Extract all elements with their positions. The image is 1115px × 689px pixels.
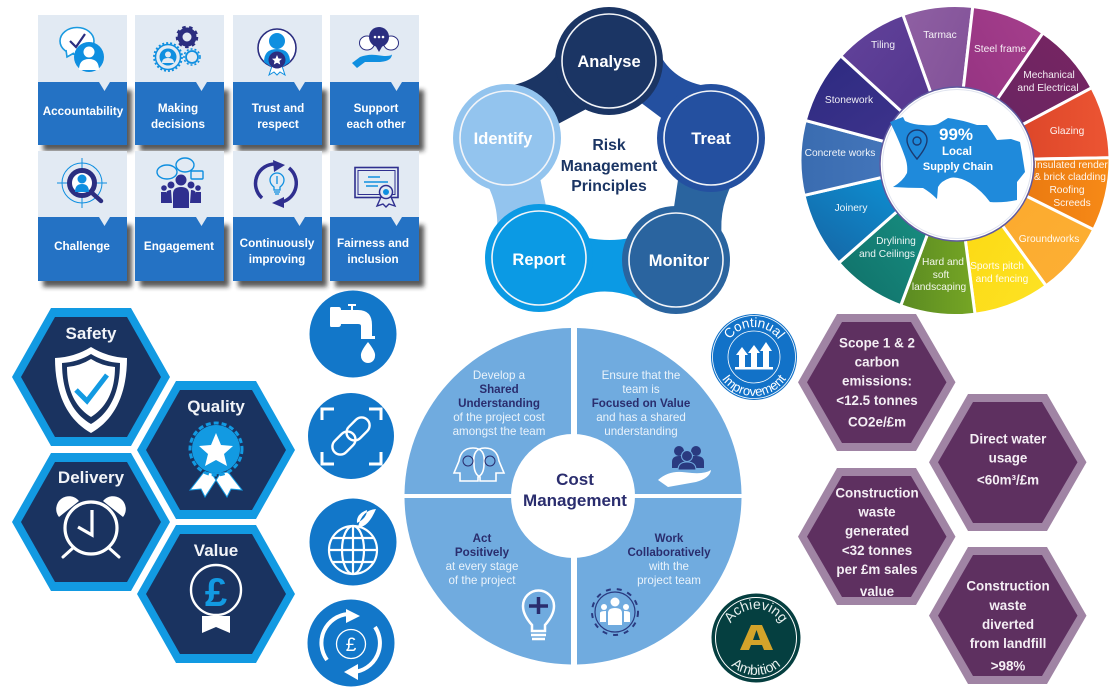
segment labels: [805, 30, 1108, 293]
card: Challenge: Challenge: [54, 240, 110, 253]
text: centre title: Principles: [571, 178, 647, 195]
text: shared understanding: Understanding: [458, 397, 540, 410]
panel: hexagon Quality: [137, 381, 295, 519]
segment labels: Tarmac: [923, 30, 957, 41]
icon: rosette: [190, 423, 242, 497]
panel: hexagon carbon emissions: CO2e/£m: [848, 414, 906, 430]
text: focused on value: [592, 369, 691, 438]
segment labels: Groundworks: [1019, 234, 1079, 245]
icon: linked chain: [308, 393, 394, 479]
text: focused on value: team is: [622, 383, 660, 396]
card: Continuously improving: improving: [249, 253, 305, 266]
circle: Analyse: Analyse: [577, 53, 641, 71]
card: Continuously improving: [233, 151, 327, 287]
segment labels: Hard and: [922, 257, 964, 268]
icon: hand with speech bubbles: [352, 27, 398, 68]
icon: speech bubble with person: [60, 28, 104, 72]
badge: continual improvement: Continual: [724, 317, 786, 339]
panel: hexagon direct water: <60m³/£m: [977, 472, 1039, 488]
panel: local supply chain wheel: [800, 5, 1110, 316]
text: focused on value: Focused on Value: [592, 397, 691, 410]
segment labels: Drylining: [876, 236, 916, 247]
text: work collaboratively: with the: [648, 560, 689, 573]
card: Fairness and inclusion: [330, 151, 424, 287]
panel: hexagon waste diverted: Construction: [966, 578, 1050, 594]
card: Trust and respect: respect: [257, 118, 299, 131]
connectors: [488, 43, 737, 302]
icon: pound cycle: [308, 600, 394, 686]
icon: shield: [55, 347, 127, 433]
panel: hexagon carbon emissions: emissions:: [842, 374, 912, 388]
icon: pound medal: [191, 565, 241, 633]
icon: pound medal: £: [205, 571, 227, 615]
panel: hexagon waste generated: value: [860, 584, 894, 599]
icon: team in gear: [592, 589, 638, 635]
heading: Cost Management: Cost: [556, 470, 594, 489]
panel: hexagon waste generated: [798, 468, 956, 605]
icon: person with star badge: [258, 29, 296, 75]
heading: Cost Management: Management: [523, 491, 627, 510]
card: Support each other: each other: [346, 118, 406, 131]
panel: hexagon carbon emissions: [798, 314, 956, 451]
text: focused on value: Ensure that the: [602, 369, 680, 382]
panel: hexagon Safety: [12, 308, 170, 446]
icon: lightbulb with plus: [523, 590, 554, 639]
segment labels: Screeds: [1053, 198, 1091, 209]
card: Challenge: [38, 151, 132, 287]
text: centre title: Management: [561, 158, 658, 175]
card: Fairness and inclusion: Fairness and: [337, 237, 409, 250]
text: work collaboratively: project team: [637, 574, 701, 587]
panel: hexagon waste diverted: >98%: [991, 658, 1025, 674]
panel: hexagon waste generated: per £m sales: [836, 562, 918, 577]
card: Fairness and inclusion: inclusion: [347, 253, 399, 266]
icon: magnifier on target: [57, 158, 107, 208]
card: Engagement: [135, 151, 229, 287]
segment labels: soft: [933, 270, 949, 281]
text: work collaboratively: Collaboratively: [627, 546, 711, 559]
panel: hexagon Value: [137, 525, 295, 663]
text: act positively: Act: [473, 532, 491, 545]
text: centre title: [561, 137, 658, 195]
icon: pound cycle: £: [346, 635, 357, 656]
card: Support each other: Support: [354, 102, 399, 115]
badge: achieving ambition: [712, 594, 800, 682]
text: centre title: Risk: [592, 137, 626, 154]
segment labels: Joinery: [835, 203, 868, 214]
card: Accountability: [38, 15, 132, 151]
panel: hexagon waste generated: waste: [857, 504, 896, 520]
card: Trust and respect: [233, 15, 327, 151]
icon: certificate: [355, 168, 398, 207]
card: Making decisions: decisions: [151, 118, 205, 131]
panel: hexagon waste diverted: [929, 547, 1086, 684]
panel: hexagon direct water: usage: [989, 450, 1027, 466]
wheel segments: [800, 5, 1110, 316]
panel: hexagon waste generated: Construction: [835, 486, 919, 500]
panel: hexagon direct water: [929, 394, 1086, 531]
segment labels: landscaping: [912, 282, 967, 293]
panel: hexagon waste diverted: diverted: [982, 617, 1034, 632]
icon: globe with leaves: [310, 498, 396, 586]
icon: group with speech bubbles: [157, 158, 203, 208]
circle: Report: Report: [512, 251, 566, 269]
icon: two heads with gears: [454, 448, 504, 481]
text: focused on value: and has a shared: [596, 411, 686, 424]
card: Making decisions: Making: [158, 102, 198, 115]
panel: hexagon waste diverted: from landfill: [970, 636, 1046, 651]
panel: values cards: [38, 15, 424, 287]
panel: hexagon waste generated: <32 tonnes: [842, 543, 912, 558]
panel: hexagon direct water: Direct water: [970, 432, 1047, 446]
badge: continual improvement: Improvement: [722, 374, 786, 396]
text: shared understanding: amongst the team: [453, 425, 545, 438]
centre circle with Jersey map: [880, 87, 1034, 241]
heading: Cost Management: [523, 470, 627, 510]
badge: achieving ambition: Ambition: [731, 660, 780, 675]
circle: Analyse: [555, 7, 663, 115]
panel: hexagon waste diverted: waste: [988, 598, 1027, 613]
segment labels: Roofing: [1049, 185, 1085, 196]
panel: hexagon Safety: Safety: [65, 324, 117, 343]
panel: hexagon Quality: Quality: [187, 397, 245, 416]
text: shared understanding: Develop a: [473, 369, 526, 382]
centre circle with Jersey map: Local: [942, 146, 972, 158]
panel: hexagon waste generated: generated: [845, 524, 909, 538]
panel: hexagon Delivery: Delivery: [58, 468, 125, 487]
text: shared understanding: Shared: [479, 383, 519, 396]
text: act positively: Positively: [455, 546, 510, 559]
panel: cost management: [404, 328, 742, 664]
segment labels: Glazing: [1050, 126, 1085, 137]
badge: achieving ambition: Achieving: [726, 599, 787, 624]
text: act positively: of the project: [448, 574, 516, 587]
quadrants: [404, 328, 742, 664]
segment labels: Concrete works: [805, 148, 875, 159]
text: shared understanding: of the project cost: [453, 411, 546, 424]
text: shared understanding: [453, 369, 546, 438]
circle: Monitor: [622, 206, 730, 314]
panel: hexagon carbon emissions: carbon: [855, 354, 899, 370]
circle: Treat: [657, 84, 765, 192]
card: Engagement: Engagement: [144, 240, 214, 253]
panel: hexagon Value: Value: [194, 541, 238, 560]
text: work collaboratively: Work: [655, 532, 684, 545]
card: Making decisions: [135, 15, 229, 151]
circle: Monitor: Monitor: [649, 252, 710, 270]
centre circle with Jersey map: Supply Chain: [923, 161, 993, 173]
text: act positively: at every stage: [446, 560, 518, 573]
segment labels: Mechanical: [1023, 70, 1075, 81]
circle: Treat: Treat: [691, 130, 731, 148]
card: Continuously improving: Continuously: [240, 237, 315, 250]
text: focused on value: understanding: [604, 425, 678, 438]
circle: Identify: Identify: [474, 130, 533, 148]
icon: cycle arrows with bulb: [256, 160, 296, 208]
icon: team in hand: [658, 446, 711, 487]
badge: continual improvement: [711, 314, 797, 400]
icon: alarm clock: [56, 496, 126, 557]
segment labels: and Electrical: [1017, 83, 1079, 94]
icon: location pin: [907, 130, 927, 159]
text: work collaboratively: [627, 532, 711, 587]
segment labels: and Ceilings: [859, 249, 915, 260]
text: act positively: [446, 532, 518, 587]
panel: risk management principles: [453, 7, 765, 314]
icon: water tap: [310, 290, 396, 378]
segment labels: and fencing: [976, 274, 1029, 285]
card: Support each other: [330, 15, 424, 151]
card: Accountability: Accountability: [43, 105, 124, 118]
card: Trust and respect: Trust and: [252, 102, 304, 115]
panel: hexagon carbon emissions: <12.5 tonnes: [836, 393, 918, 408]
segment labels: Insulated render: [1034, 160, 1108, 171]
icon: gears: [154, 27, 200, 71]
panel: hexagon carbon emissions: Scope 1 & 2: [839, 336, 915, 350]
circle: Identify: [453, 84, 561, 192]
centre circle with Jersey map: 99%: [939, 125, 973, 144]
segment labels: Sports pitch: [970, 261, 1024, 272]
segment labels: Steel frame: [974, 44, 1026, 55]
segment labels: & brick cladding: [1034, 172, 1106, 183]
circle: Report: [485, 204, 593, 312]
segment labels: Tiling: [871, 40, 895, 51]
segment labels: Stonework: [825, 95, 874, 106]
panel: hexagon Delivery: [12, 453, 170, 591]
